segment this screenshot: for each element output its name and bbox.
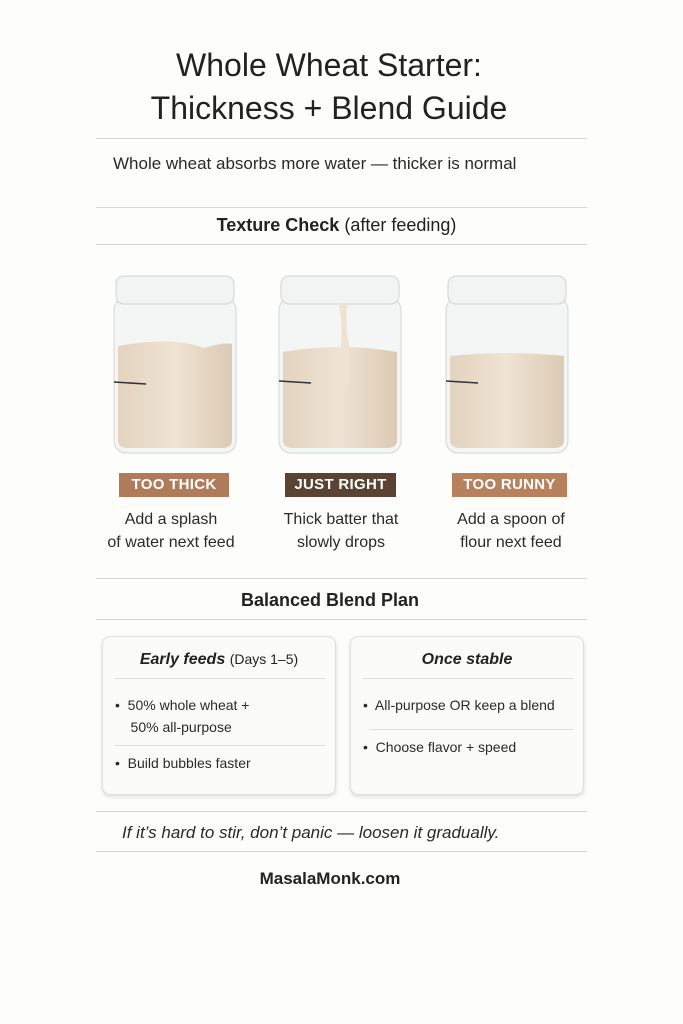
heading: blend plan: Balanced Blend Plan: [241, 590, 419, 610]
tag: too thick: TOO THICK: [132, 476, 216, 493]
jar: just right: [279, 276, 401, 453]
jar: too thick: [114, 276, 236, 453]
jar: too runny: [446, 276, 568, 453]
caption: too runny: flour next feed: [460, 534, 562, 551]
tag: too runny: TOO RUNNY: [463, 476, 556, 493]
title: [151, 47, 507, 126]
caption: just right: Thick batter that: [284, 511, 398, 528]
tag: too runny: [452, 473, 567, 497]
title: Thickness + Blend Guide: [151, 90, 507, 126]
tag: just right: [285, 473, 396, 497]
subtitle: Whole wheat absorbs more water — thicker is normal: [113, 154, 516, 173]
card: once stable: Once stable: [422, 651, 512, 668]
footer note: If it’s hard to stir, don’t panic — loosen it gradually.: [122, 823, 499, 842]
card: early feeds: 50% all-purpose: [131, 719, 232, 735]
card: early feeds: [102, 636, 336, 795]
card: once stable: • All-purpose OR keep a blend: [363, 697, 555, 713]
card: once stable: • Choose flavor + speed: [363, 739, 516, 755]
card: early feeds: • 50% whole wheat +: [115, 697, 249, 713]
card: early feeds: Early feeds (Days 1–5): [140, 651, 298, 668]
caption: too thick: [107, 511, 235, 551]
tag: just right: JUST RIGHT: [294, 476, 387, 493]
card: once stable: [350, 636, 584, 795]
caption: too thick: Add a splash: [125, 511, 217, 528]
title: Whole Wheat Starter:: [176, 47, 482, 83]
caption: just right: [284, 511, 398, 551]
heading: texture check: Texture Check (after feeding): [217, 215, 456, 235]
jars illustration: [114, 276, 568, 454]
card: early feeds: • Build bubbles faster: [115, 755, 251, 771]
caption: too runny: [457, 511, 565, 551]
source: MasalaMonk.com: [260, 869, 400, 888]
caption: too thick: of water next feed: [107, 534, 235, 551]
tag: too thick: [119, 473, 229, 497]
caption: too runny: Add a spoon of: [457, 511, 565, 528]
caption: just right: slowly drops: [297, 534, 385, 551]
